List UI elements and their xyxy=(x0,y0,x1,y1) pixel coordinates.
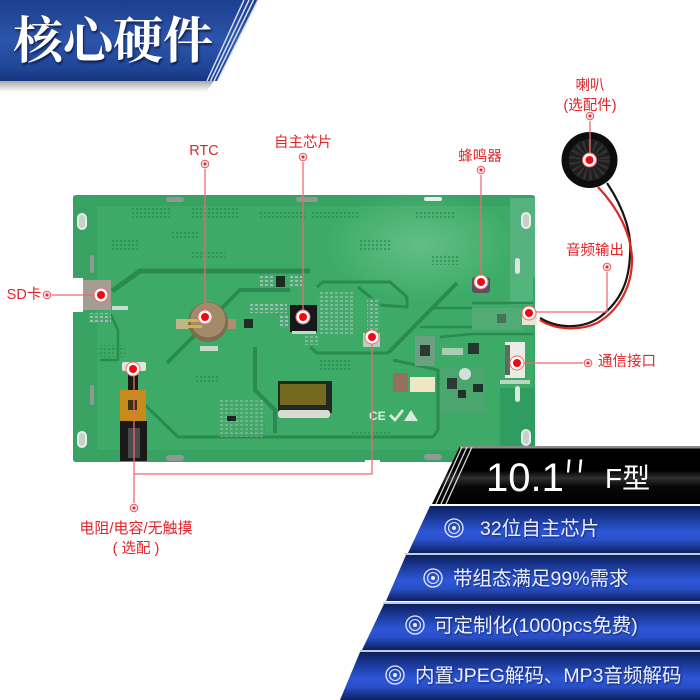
upper right pale region xyxy=(510,198,535,278)
mounting holes xyxy=(78,213,530,447)
row text: 32位自主芯片 xyxy=(480,518,599,540)
speaker connector on board xyxy=(522,310,537,325)
spec panel header xyxy=(432,446,700,515)
row text: 可定制化(1000pcs免费) xyxy=(434,615,638,637)
label: comm interface: 通信接口 xyxy=(598,353,656,370)
label: optional: ( 选配 ) xyxy=(113,540,159,557)
copper traces xyxy=(100,271,533,437)
label: speaker: 喇叭 xyxy=(576,77,604,94)
main chip xyxy=(250,276,317,334)
row text: 内置JPEG解码、MP3音频解码 xyxy=(415,665,682,687)
comm connector xyxy=(500,342,530,384)
speaker body xyxy=(562,132,618,188)
icon: target xyxy=(445,519,463,537)
edge clips xyxy=(90,197,520,461)
label: audio output: 音频输出 xyxy=(566,242,624,259)
small callout end dots xyxy=(43,112,611,512)
solder pad patches xyxy=(100,208,460,438)
buzzer xyxy=(472,277,490,293)
certification marks: CE xyxy=(369,409,386,423)
touch flex cable xyxy=(120,362,147,461)
title text: 核心硬件 xyxy=(13,1,213,73)
spec row 4 xyxy=(340,652,700,700)
inner copper area xyxy=(97,206,533,450)
small components cluster xyxy=(220,292,522,437)
label: buzzer: 蜂鸣器 xyxy=(458,148,502,165)
RTC battery holder xyxy=(176,302,253,351)
callout lines xyxy=(52,121,607,503)
circuit board xyxy=(73,190,537,462)
spec row 2 xyxy=(386,555,700,601)
model size: 10.1 xyxy=(486,456,564,500)
label: SD card: SD卡 xyxy=(7,286,41,303)
right lower strip xyxy=(500,388,535,462)
row text: 带组态满足99%需求 xyxy=(453,568,629,590)
label: touch options: 电阻/电容/无触摸 xyxy=(79,520,193,537)
spec row 1 xyxy=(408,506,700,553)
label: speaker optional: (选配件) xyxy=(563,97,617,114)
model type: F型 xyxy=(605,463,650,494)
certification marks xyxy=(369,409,418,423)
LCD flex connector xyxy=(278,381,332,418)
speaker wires xyxy=(540,183,630,326)
speaker xyxy=(540,132,632,328)
icon: target xyxy=(386,666,404,684)
label: own chip: 自主芯片 xyxy=(274,134,332,151)
icon: target xyxy=(406,616,424,634)
board outline xyxy=(73,195,535,462)
icon: target xyxy=(424,569,442,587)
large red markers xyxy=(94,153,596,376)
spec row 3 xyxy=(362,604,700,650)
white connector xyxy=(393,373,435,392)
SD card slot xyxy=(83,280,128,323)
title banner xyxy=(0,0,258,92)
inch mark: '' xyxy=(564,448,587,515)
label: RTC: RTC xyxy=(189,143,219,159)
